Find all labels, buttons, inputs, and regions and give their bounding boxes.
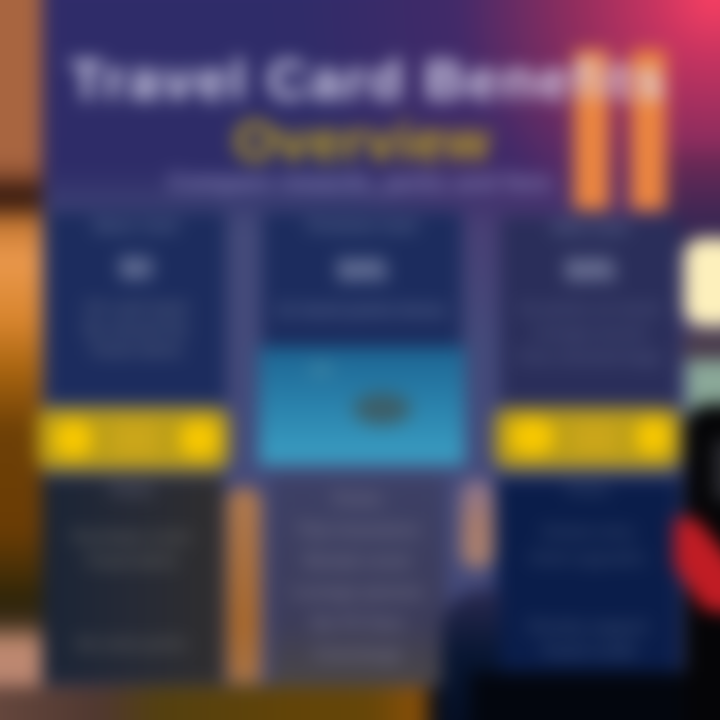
right lower footer: Priority support xyxy=(528,619,648,636)
left plan details: No annual fee xyxy=(84,321,188,338)
panel: left top xyxy=(46,212,226,404)
left lower heading: Perks xyxy=(110,482,154,499)
middle lower text: No FX fees xyxy=(311,613,405,633)
right edge: cream light xyxy=(684,238,720,326)
right edge: dark figure xyxy=(684,404,720,720)
right plan value: $95 xyxy=(565,254,615,287)
left plan details: Travel alerts xyxy=(89,342,183,359)
right plan details: Free checked bags xyxy=(518,349,662,366)
band: left yellow xyxy=(37,408,229,470)
panel: middle bottom xyxy=(270,476,446,684)
panel: right bottom xyxy=(496,478,680,682)
dark figure bottom centre-right xyxy=(442,590,500,720)
left lower details: Purchase cover xyxy=(72,529,192,546)
right plan label: Elite Card xyxy=(553,220,627,237)
right side shade xyxy=(665,150,720,250)
right lower heading: Perks xyxy=(566,482,610,499)
panel: teal image xyxy=(259,347,465,465)
band: right yellow xyxy=(495,408,681,468)
panel: right top xyxy=(500,216,680,406)
right edge: grey coat xyxy=(714,440,720,500)
band highlight left xyxy=(53,420,93,458)
middle lower text: Trip insurance xyxy=(296,520,420,540)
panel: left bottom xyxy=(42,476,224,684)
right lower footer: Travel credit xyxy=(541,643,635,660)
left lower details xyxy=(72,527,192,571)
middle lower text: Concierge xyxy=(314,644,402,664)
right lower details: Global entry xyxy=(541,524,635,541)
right lower details: Hotel upgrades xyxy=(530,550,646,567)
right edge: teal shape xyxy=(686,360,720,430)
left plan details: 1% cash back xyxy=(84,300,188,317)
dark floor bottom right xyxy=(470,672,720,720)
band highlight left xyxy=(509,418,555,456)
middle lower text xyxy=(292,489,424,666)
right plan details: Lounge access xyxy=(532,325,648,342)
middle lower text: Lounge passes xyxy=(292,582,424,602)
band highlight right xyxy=(635,418,671,456)
right edge: brown gap xyxy=(684,330,720,364)
left plan label: Basic Card xyxy=(94,218,178,235)
icon: island xyxy=(353,393,411,425)
left lower details: Fraud alerts xyxy=(86,553,178,570)
right edge: red shape xyxy=(660,504,720,626)
title: Travel Card Benefits xyxy=(70,48,668,111)
middle lower text: Rental cover xyxy=(304,551,412,571)
left edge strip xyxy=(0,0,42,720)
right plan details xyxy=(518,301,662,366)
bottom edge strip xyxy=(0,686,720,720)
right lower details xyxy=(530,524,646,567)
right plan details: 3x points on travel xyxy=(519,301,661,318)
orange pillars top right xyxy=(574,50,609,210)
left plan value: $0 xyxy=(119,252,153,285)
panel: middle top xyxy=(262,212,462,347)
subtitle heading: Overview xyxy=(233,109,491,172)
left plan details xyxy=(82,298,188,360)
middle plan details: 2x travel points bonus xyxy=(277,302,447,319)
icon: sky mark xyxy=(309,363,333,375)
orange pillar lower right xyxy=(461,480,494,568)
band highlight right xyxy=(179,420,219,458)
tagline: Compare rewards, perks and fees xyxy=(168,169,552,196)
orange pillar lower left xyxy=(227,488,261,683)
middle plan value: $95 xyxy=(337,254,387,287)
middle plan label: Premium Card xyxy=(307,218,417,235)
left lower footer: No extra perks xyxy=(76,636,188,653)
band highlight middle xyxy=(573,422,617,454)
right lower footer xyxy=(528,619,648,660)
middle lower text: Perks xyxy=(333,489,383,509)
band highlight middle xyxy=(113,422,157,456)
